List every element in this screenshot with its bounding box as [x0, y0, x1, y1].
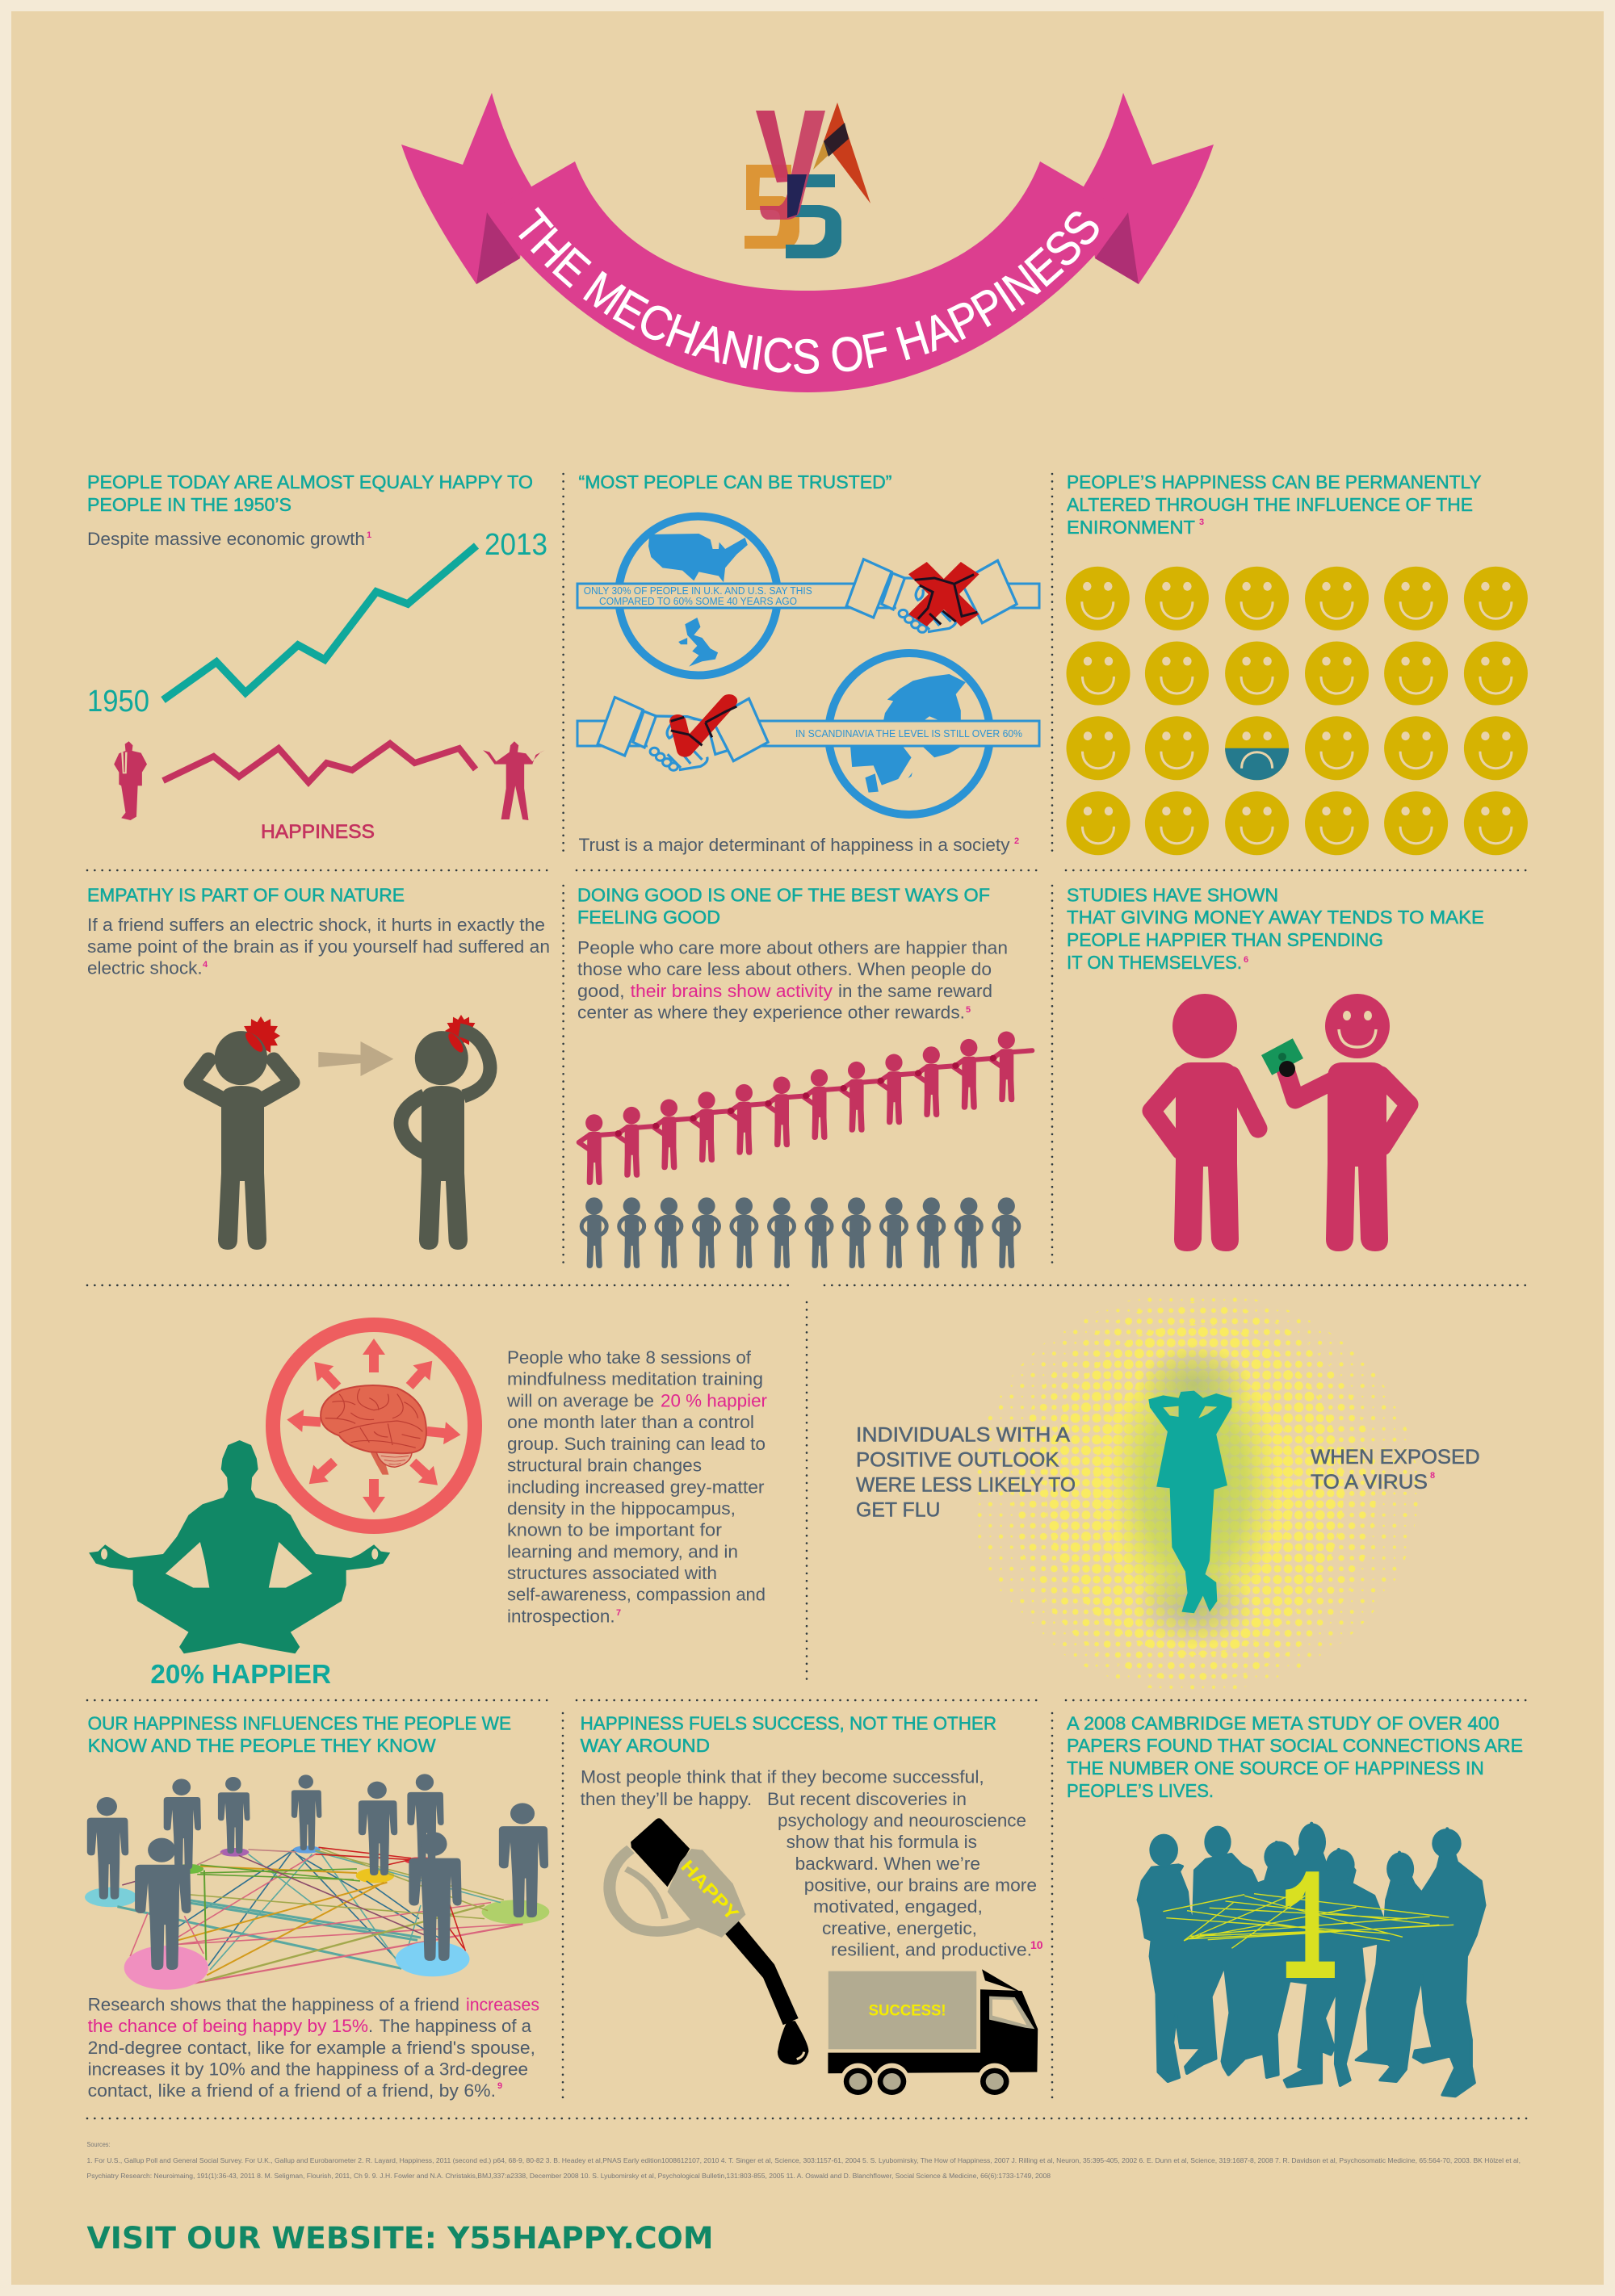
- panel: economic growth vs happiness: [87, 471, 547, 843]
- heading: HAPPINESS FUELS SUCCESS, NOT THE OTHER: [581, 1713, 996, 1734]
- panel: smiley faces: [1066, 471, 1528, 855]
- title: THE MECHANICS OF HAPPINESS: [518, 207, 1099, 374]
- body text: electric shock.: [87, 958, 203, 978]
- body text: good,: [577, 981, 625, 1001]
- body text: structural brain changes: [507, 1456, 702, 1476]
- sources: Sources:: [87, 2141, 110, 2148]
- body text: 10: [1030, 1938, 1043, 1951]
- icon: relaxed person silhouette: [1148, 1391, 1231, 1613]
- icon: man shrugging: [483, 741, 545, 820]
- heading: DOING GOOD IS ONE OF THE BEST WAYS OF: [577, 885, 990, 906]
- body text: [88, 1995, 539, 2101]
- subheading: Despite massive economic growth: [87, 529, 365, 549]
- body text: Research shows that the happiness of a friend: [88, 1995, 459, 2015]
- body text: self-awareness, compassion and: [507, 1585, 766, 1605]
- body text: those who care less about others. When people do: [577, 959, 992, 979]
- website call to action: VISIT OUR WEBSITE: Y55HAPPY.COM: [87, 2221, 714, 2256]
- number one: 1: [1279, 1843, 1339, 2026]
- label happiness: HAPPINESS: [261, 821, 375, 843]
- band: US and UK statistic: [577, 584, 1039, 608]
- ribbon right tail: [1084, 93, 1214, 284]
- heading: WAY AROUND: [581, 1735, 710, 1756]
- arrow: [318, 1041, 393, 1076]
- text left: INDIVIDUALS WITH A: [856, 1424, 1070, 1447]
- heading: STUDIES HAVE SHOWN: [1067, 885, 1278, 906]
- body text: known to be important for: [507, 1520, 722, 1540]
- panel: doing good: [577, 885, 1032, 1268]
- icon: brain: [321, 1385, 426, 1475]
- body text: 7: [616, 1608, 621, 1618]
- circle with Scandinavia map: [828, 653, 990, 815]
- icon: happy person giving money: [1261, 994, 1409, 1251]
- heading: THE NUMBER ONE SOURCE OF HAPPINESS IN: [1067, 1758, 1484, 1779]
- body text: [87, 915, 550, 978]
- body text: show that his formula is: [787, 1832, 977, 1852]
- text left: POSITIVE OUTLOOK: [856, 1449, 1059, 1472]
- icon: handshake with check mark: [598, 698, 768, 772]
- heading: PEOPLE’S LIVES.: [1067, 1780, 1214, 1801]
- heading: “MOST PEOPLE CAN BE TRUSTED”: [578, 471, 891, 492]
- rising row of linked red figures: [579, 1032, 1032, 1185]
- panel: meditation: [89, 1325, 767, 1689]
- economic growth line: [163, 546, 476, 700]
- body text: People who care more about others are happier than: [577, 938, 1008, 958]
- icon: fuel nozzle: [610, 1818, 808, 2065]
- body text: group. Such training can lead to: [507, 1434, 766, 1454]
- body text: density in the hippocampus,: [507, 1498, 736, 1519]
- smiley grid: [1066, 567, 1528, 855]
- heading: PAPERS FOUND THAT SOCIAL CONNECTIONS ARE: [1067, 1735, 1523, 1756]
- label: 20% happier: 20% HAPPIER: [150, 1659, 331, 1689]
- body text: 4: [203, 960, 208, 970]
- text left: GET FLU: [856, 1499, 940, 1522]
- heading: 6: [1244, 955, 1248, 965]
- heading: [1067, 1713, 1523, 1801]
- network diagram: [85, 1774, 549, 1990]
- happiness line: [163, 744, 476, 782]
- body text: center as where they experience other rewards.: [577, 1003, 965, 1023]
- panel: social connections: [1067, 1713, 1523, 2097]
- body text: increases it by 10% and the happiness of a 3rd-degree: [88, 2059, 528, 2080]
- heading: A 2008 CAMBRIDGE META STUDY OF OVER 400: [1067, 1713, 1500, 1734]
- band: US and UK statistic: COMPARED TO 60% SOME 40 YEARS AGO: [599, 596, 797, 607]
- caption: Trust is a major determinant of happiness in a society: [578, 835, 1009, 855]
- label 1950: 1950: [87, 685, 149, 719]
- icon: truck: [828, 1969, 1038, 2100]
- subheading: 1: [367, 530, 371, 540]
- body text: 20 % happier: [661, 1390, 767, 1410]
- dotted dividers: [87, 474, 1527, 2118]
- row of grey figures: [581, 1197, 1019, 1268]
- body text: [581, 1767, 1043, 1960]
- heading: KNOW AND THE PEOPLE THEY KNOW: [88, 1735, 436, 1756]
- panel: positive outlook: [856, 1292, 1480, 1695]
- heading: FEELING GOOD: [577, 907, 720, 928]
- body text: including increased grey-matter: [507, 1477, 764, 1497]
- body text: backward. When we’re: [795, 1854, 980, 1874]
- label: success: SUCCESS!: [869, 2002, 946, 2020]
- body text: positive, our brains are more: [804, 1875, 1037, 1896]
- heading: [1067, 471, 1482, 538]
- icon: meditating figure: [89, 1440, 390, 1653]
- sources: 1. For U.S., Gallup Poll and General Social Survey. For U.K., Gallup and Eurobarometer 2. R. Layard, Happiness, 2011 (second ed.) p64, 68-9, 80-82 3. B. Headey et al,PNAS Early edition1008612107, 2010 4. T. Singer et al, Science, 303:1157-61, 2004 5. S. Lyubomirsky, The How of Happiness, 2007 J. Rilling et al, Neuron, 35:395-405, 2002 6. E. Dunn et al, Science, 319:1687-8, 2008 7. R. Davidson et al, Psychosomatic Medicine, 65:564-70, 2003. BK Hölzel et al,: [87, 2157, 1521, 2164]
- body text: mindfulness meditation training: [507, 1369, 763, 1389]
- body text: structures associated with: [507, 1563, 717, 1583]
- text right: [1311, 1446, 1480, 1494]
- body text: same point of the brain as if you yourself had suffered an: [87, 936, 550, 957]
- heading: [1067, 885, 1484, 973]
- panel: trust: [577, 471, 1039, 855]
- heading: [88, 1713, 511, 1756]
- label: happy: HAPPY: [677, 1856, 743, 1925]
- heading: [581, 1713, 996, 1756]
- circle with US and UK maps: [619, 517, 778, 675]
- panel: happiness influence network: [85, 1713, 549, 2101]
- halftone glow: [961, 1292, 1429, 1695]
- body text: 2nd-degree contact, like for example a friend's spouse,: [88, 2038, 535, 2058]
- heading: PEOPLE HAPPIER THAN SPENDING: [1067, 929, 1383, 950]
- text left: [856, 1424, 1076, 1522]
- text right: 8: [1430, 1471, 1435, 1481]
- logo: Y55: [745, 103, 870, 258]
- body text: creative, energetic,: [822, 1918, 977, 1938]
- body text: The happiness of a: [380, 2016, 532, 2036]
- icon: person empathising: [401, 1015, 490, 1250]
- text right: WHEN EXPOSED: [1311, 1446, 1480, 1469]
- icon: brain ring with arrows: [273, 1325, 475, 1527]
- icon: man hands on hips: [114, 741, 147, 820]
- band: US and UK statistic: ONLY 30% OF PEOPLE IN U.K. AND U.S. SAY THIS: [584, 585, 812, 597]
- icon: group silhouette: [1139, 1823, 1485, 2097]
- body text: increases: [466, 1995, 539, 2015]
- body text: introspection.: [507, 1606, 615, 1626]
- heading: OUR HAPPINESS INFLUENCES THE PEOPLE WE: [88, 1713, 511, 1734]
- heading: PEOPLE IN THE 1950’S: [87, 494, 292, 515]
- heading: ENIRONMENT: [1067, 517, 1195, 538]
- heading: 3: [1199, 517, 1204, 527]
- body text: If a friend suffers an electric shock, it hurts in exactly the: [87, 915, 545, 935]
- body text: learning and memory, and in: [507, 1541, 738, 1561]
- ribbon left tail: [401, 93, 531, 284]
- body text: Most people think that if they become successful,: [581, 1767, 984, 1787]
- heading: PEOPLE’S HAPPINESS CAN BE PERMANENTLY: [1067, 471, 1482, 492]
- heading: PEOPLE TODAY ARE ALMOST EQUALY HAPPY TO: [87, 471, 533, 492]
- body text: in the same reward: [838, 981, 992, 1001]
- body text: resilient, and productive.: [831, 1940, 1032, 1960]
- heading: [577, 885, 990, 928]
- band: Scandinavia statistic: [577, 721, 1039, 746]
- panel: empathy: [87, 885, 550, 1250]
- text right: TO A VIRUS: [1311, 1471, 1428, 1494]
- heading: IT ON THEMSELVES.: [1067, 952, 1242, 973]
- band: Scandinavia statistic: IN SCANDINAVIA THE LEVEL IS STILL OVER 60%: [795, 728, 1022, 739]
- heading: THAT GIVING MONEY AWAY TENDS TO MAKE: [1067, 907, 1484, 928]
- caption: 2: [1014, 836, 1019, 846]
- body text: one month later than a control: [507, 1412, 754, 1432]
- icon: person in pain: [191, 1016, 292, 1250]
- body text: psychology and neouroscience: [778, 1811, 1026, 1831]
- title ribbon banner: [401, 93, 1214, 392]
- panel: happiness fuels success: [581, 1713, 1043, 2100]
- text left: WERE LESS LIKELY TO: [856, 1474, 1076, 1497]
- body text: the chance of being happy by 15%: [88, 2016, 368, 2036]
- body text: their brains show activity: [631, 981, 833, 1001]
- icon: handshake crossed out: [846, 559, 1017, 634]
- label 2013: 2013: [484, 528, 547, 562]
- ribbon main band: [487, 161, 1128, 392]
- icon: person receiving: [1151, 994, 1258, 1251]
- body text: contact, like a friend of a friend of a friend, by 6%.: [88, 2080, 496, 2101]
- panel: giving money away: [1067, 885, 1484, 1251]
- body text: then they’ll be happy. But recent discoveries in: [581, 1789, 967, 1809]
- body text: .: [368, 2016, 373, 2036]
- body text: 5: [966, 1005, 971, 1015]
- body text: [506, 1347, 767, 1626]
- body text: 9: [497, 2081, 502, 2091]
- body text: will on average be: [506, 1390, 654, 1410]
- sources: Psychiatry Research: Neuroimaing, 191(1):36-43, 2011 8. M. Seligman, Flourish, 2011, Ch 9. 9. J.H. Fowler and N.A. Christakis,BMJ,337:a2338, December 2008 10. S. Lyubomirsky et al, Psychological Bulletin,131:803-855, 2005 11. A. Oswald and D. Blanchflower, Social Science & Medicine, 66(6):1733-1749, 2008: [87, 2172, 1051, 2180]
- sources: [87, 2141, 1521, 2180]
- body text: People who take 8 sessions of: [507, 1347, 752, 1368]
- body text: motivated, engaged,: [813, 1896, 983, 1917]
- heading: ALTERED THROUGH THE INFLUENCE OF THE: [1067, 494, 1473, 515]
- heading: EMPATHY IS PART OF OUR NATURE: [87, 885, 405, 906]
- body text: [577, 938, 1008, 1023]
- heading: [87, 471, 533, 515]
